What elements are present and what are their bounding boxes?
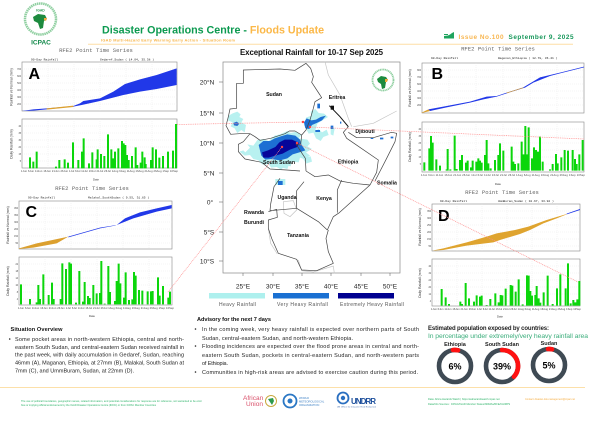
axis labels: 50°E (383, 282, 398, 290)
chart D: 1Jun 6Jun 11Jun 16Jun 21Jun 26Jun 1Jul 6Jul 11Jul 16Jul 21Jul 26Jul 1Aug 6Aug 11Aug 16Aug 21Aug 26Aug 1Sep 10Sep (431, 307, 582, 311)
chart C: Malakal_SouthSudan ( 9.55, 31.65 ) (88, 196, 149, 200)
chart C: Date (89, 314, 95, 318)
date: September 9, 2025 (508, 34, 574, 41)
chart C: 10 (15, 285, 19, 287)
donut: South Sudan: South Sudan (485, 342, 520, 348)
chart D (418, 182, 582, 318)
chart D: Daily Rainfall (mm) (418, 268, 422, 298)
chart A: 1Jun 6Jun 11Jun 16Jun 21Jun 26Jun 1Jul 6Jul 11Jul 16Jul 21Jul 26Jul 1Aug 6Aug 11Aug 16Aug 21Aug 26Aug 1Sep 10Sep (21, 169, 179, 173)
chart D: 90-Day Rainfall (440, 199, 467, 203)
chart C: 200 (14, 229, 19, 231)
chart A: 5 (20, 161, 22, 163)
country labels: Djibouti (355, 129, 375, 135)
logo: UNDRR (337, 392, 376, 408)
donut: Ethiopia: Ethiopia (444, 342, 467, 348)
chart D: 4 (430, 301, 432, 303)
chart D: Rainfall vs Normal (mm) (418, 208, 422, 246)
chart B: 600 (417, 84, 422, 86)
chart C: 1Jun 6Jun 11Jun 16Jun 21Jun 26Jun 1Jul 6Jul 11Jul 16Jul 21Jul 26Jul 1Aug 6Aug 11Aug 16Aug 21Aug 26Aug 1Sep 10Sep (18, 306, 175, 310)
axis labels: 10°S (200, 258, 215, 266)
issue number: Issue No.100 (458, 34, 504, 41)
chart C: 22 (15, 264, 19, 266)
country labels (244, 92, 397, 239)
chart title: RFE2 Point Time Series (59, 47, 133, 54)
axis labels: 5°N (204, 170, 215, 178)
chart A: 20 (18, 147, 22, 149)
panel: advisory (195, 317, 419, 376)
chart D: 350 (427, 211, 432, 213)
donut: South Sudan (485, 342, 520, 382)
donut: South Sudan: 39% (493, 362, 511, 372)
panel: situation overview: the past week, with daily accumulation in Gedaref, Sudan, reaching (15, 352, 184, 358)
country labels: Rwanda (244, 210, 264, 216)
legend: Extremely Heavy Rainfall (340, 302, 404, 308)
chart title: RFE2 Point Time Series (465, 189, 539, 196)
chart B: 200 (417, 105, 422, 107)
chart D: 50 (428, 246, 432, 248)
heading: Situation Overview (10, 327, 63, 333)
logo: UNDRR: UN Office for Disaster Risk Reduction (337, 406, 376, 408)
donut: Ethiopia: 6% (448, 362, 462, 372)
chart title: RFE2 Point Time Series (461, 46, 535, 52)
chart A: Daily Rainfall (mm) (10, 129, 14, 159)
chart A: 300 (17, 97, 22, 99)
icon: IGAD logo (25, 4, 56, 34)
icon: map logo (372, 70, 394, 90)
chart A: 700 (17, 69, 22, 71)
connector lines (168, 121, 584, 292)
chart A (10, 47, 179, 182)
chart C: 4 (17, 299, 19, 301)
chart B: 35 (418, 136, 422, 138)
chart C: 300 (14, 222, 19, 224)
panel: situation overview: 7mm (C), and UmmBuram, Sudan, at 22mm (D). (15, 368, 134, 374)
chart D: 150 (427, 239, 432, 241)
icon: issue (444, 32, 454, 38)
panel: situation overview (9, 327, 184, 374)
panel: advisory: Flooding incidences are expected over the flood prone areas in central and north- (202, 344, 419, 350)
body text: In the coming week, very heavy rainfall is expected over northern parts of South (202, 327, 419, 333)
heading: Estimated population exposed by countries: (428, 326, 549, 332)
logo: African Union: Union (246, 401, 263, 408)
chart D: 24 (428, 280, 432, 282)
panel letter: C (26, 204, 38, 221)
axis labels: 25°E (236, 282, 251, 290)
axis labels (200, 78, 398, 290)
panel: advisory: of Ethiopia. (202, 361, 228, 367)
logo: WMO: WORLD (299, 396, 309, 400)
chart A: 500 (17, 83, 22, 85)
logo: WMO: METEOROLOGICAL (299, 400, 325, 404)
chart C: 350 (14, 215, 19, 217)
legend: Very Heavy Rainfall (277, 302, 328, 308)
title: Disaster Operations Centre - Floods Update (102, 24, 324, 36)
icon: IGAD logo: IGAD (36, 8, 45, 12)
logo: African Union (243, 395, 276, 408)
country borders (226, 62, 397, 185)
chart B: Daily Rainfall (mm) (408, 132, 412, 162)
chart A: 90-Day Rainfall (31, 58, 58, 62)
axis labels: 30°E (266, 282, 281, 290)
rainfall patches (228, 104, 393, 185)
panel: advisory: Communities in high-risk areas are advised to exercise caution during this period. (202, 370, 418, 376)
logo: WMO: ORGANIZATION (299, 403, 319, 407)
footer (0, 387, 585, 408)
panel: advisory: eastern South Sudan, pockets in central-eastern Sudan, and north-western parts (202, 353, 419, 359)
chart C: 90-Day Rainfall (28, 196, 55, 200)
donut: Sudan (533, 341, 565, 381)
panel letter: A (28, 66, 40, 83)
country labels: South Sudan (263, 160, 295, 166)
legend (209, 293, 404, 308)
chart D: 32 (428, 273, 432, 275)
country labels: Ethiopia (338, 160, 358, 166)
axis labels: 15°N (200, 110, 215, 118)
chart B: 90-Day Rainfall (431, 56, 458, 60)
header (25, 4, 574, 46)
chart B: 15 (418, 157, 422, 159)
footer: Data/Info Sources : ICPAC/IGAD Member States/NDMAs/RFE/CHIRPS (428, 402, 510, 406)
axis labels: 5°S (204, 228, 215, 236)
chart B: 5 (420, 164, 422, 166)
axis labels: 20°N (200, 78, 215, 86)
chart B: Rainfall vs Normal (mm) (408, 69, 412, 107)
chart D: 40 (428, 266, 432, 268)
heading: Advisory for the next 7 days (197, 317, 271, 323)
chart D: UmmBuram_Sudan ( 10.67, 33.92 ) (498, 199, 554, 203)
panel letter: B (432, 66, 443, 83)
legend: Heavy Rainfall (219, 302, 256, 308)
chart B: 1Jun 6Jun 11Jun 16Jun 21Jun 26Jun 1Jul 6Jul 11Jul 16Jul 21Jul 26Jul 1Aug 6Aug 11Aug 16Aug 21Aug 26Aug 1Sep 10Sep (421, 173, 586, 177)
chart B: 25 (418, 143, 422, 145)
body text: Some pocket areas in north-western Ethiopia, central and north- (15, 337, 184, 343)
chart A: 35 (18, 133, 22, 135)
chart A: 600 (17, 76, 22, 78)
logo: WMO (284, 394, 325, 408)
chart C: 50 (15, 243, 19, 245)
country labels: Burundi (244, 220, 264, 226)
chart D: Date (495, 182, 501, 186)
chart C: 14 (15, 278, 19, 280)
panel: population exposure (428, 326, 588, 382)
chart B (408, 46, 586, 177)
chart B: 800 (417, 70, 422, 72)
donut: Sudan: 5% (542, 360, 556, 370)
logo: African Union: African (243, 395, 264, 402)
chart D: 20 (428, 287, 432, 289)
axis labels: 45°E (354, 282, 369, 290)
data sources: Data: Africa Hazards Watch | https://eahazardswatch.icpac.net (428, 397, 500, 401)
subheading: In percentage under extremely/very heavy rainfall area (428, 333, 588, 340)
map (200, 48, 400, 290)
chart A: 30 (18, 140, 22, 142)
country labels: Uganda (277, 195, 297, 201)
donut: Sudan: Sudan (541, 341, 558, 347)
chart title: RFE2 Point Time Series (55, 185, 129, 192)
chart D: 12 (428, 294, 432, 296)
chart C (6, 185, 175, 318)
axis labels: 35°E (295, 282, 310, 290)
chart A: 40 (18, 126, 22, 128)
logo text: ICPAC: ICPAC (31, 40, 51, 46)
chart B: 400 (417, 91, 422, 93)
chart B: 700 (417, 77, 422, 79)
chart B: 300 (417, 98, 422, 100)
axis labels: 0° (207, 198, 214, 206)
chart A: Date (93, 178, 99, 182)
chart A: Gedaref_Sudan ( 14.04, 35.38 ) (100, 58, 154, 62)
chart A: Rainfall vs Normal (mm) (10, 68, 14, 106)
panel letter: D (438, 208, 450, 225)
donut: Ethiopia (439, 342, 471, 382)
chart A: 15 (18, 154, 22, 156)
chart B: Wagonan_Ethiopia ( 12.78, 36.41 ) (498, 56, 558, 60)
map title: Exceptional Rainfall for 10-17 Sep 2025 (240, 48, 384, 57)
chart C: 8 (17, 292, 19, 294)
footer: free or implying official endorsement by the IGAD Disaster Operations Centre (IDOC) or from ICPAC Member Countries (21, 403, 157, 407)
chart A: 200 (17, 104, 22, 106)
chart D: 200 (427, 232, 432, 234)
chart C: 18 (15, 271, 19, 273)
country labels: Sudan (266, 92, 282, 98)
chart A: 400 (17, 90, 22, 92)
panel: advisory: Sudan, central-eastern Sudan, and north-western Ethiopia. (202, 336, 353, 342)
chart C: 150 (14, 236, 19, 238)
country labels: Eritrea (329, 95, 345, 101)
chart D: Date (497, 314, 503, 318)
chart D: 250 (427, 225, 432, 227)
country labels: Kenya (316, 196, 332, 202)
panel: situation overview: eastern South Sudan, and central-eastern Sudan received rainfall in (15, 345, 184, 351)
chart C: Rainfall vs Normal (mm) (6, 206, 10, 244)
chart B: 40 (418, 129, 422, 131)
chart C: 450 (14, 208, 19, 210)
disclaimer: The use of political boundaries, geographic names, related information, and potential considerations for response are for reference, not warranted to be error (21, 399, 202, 403)
subtitle: IGAD Multi-Hazard Early Warning Early Action - Situation Room (101, 38, 236, 42)
axis labels: 10°N (200, 140, 215, 148)
chart D: 300 (427, 218, 432, 220)
axis labels: 40°E (324, 282, 339, 290)
contact: Contact: disaster-risk-management@icpac.net (525, 397, 575, 401)
chart B: 20 (418, 150, 422, 152)
logo: UNDRR: UNDRR (351, 397, 376, 406)
country labels: Somalia (377, 180, 397, 186)
chart C: Daily Rainfall (mm) (6, 266, 10, 296)
country labels: Tanzania (287, 233, 309, 239)
panel: situation overview: 46mm (A), Maganan, Ethiopia, at 27mm (B), Malakal, South Sudan at (15, 360, 184, 366)
